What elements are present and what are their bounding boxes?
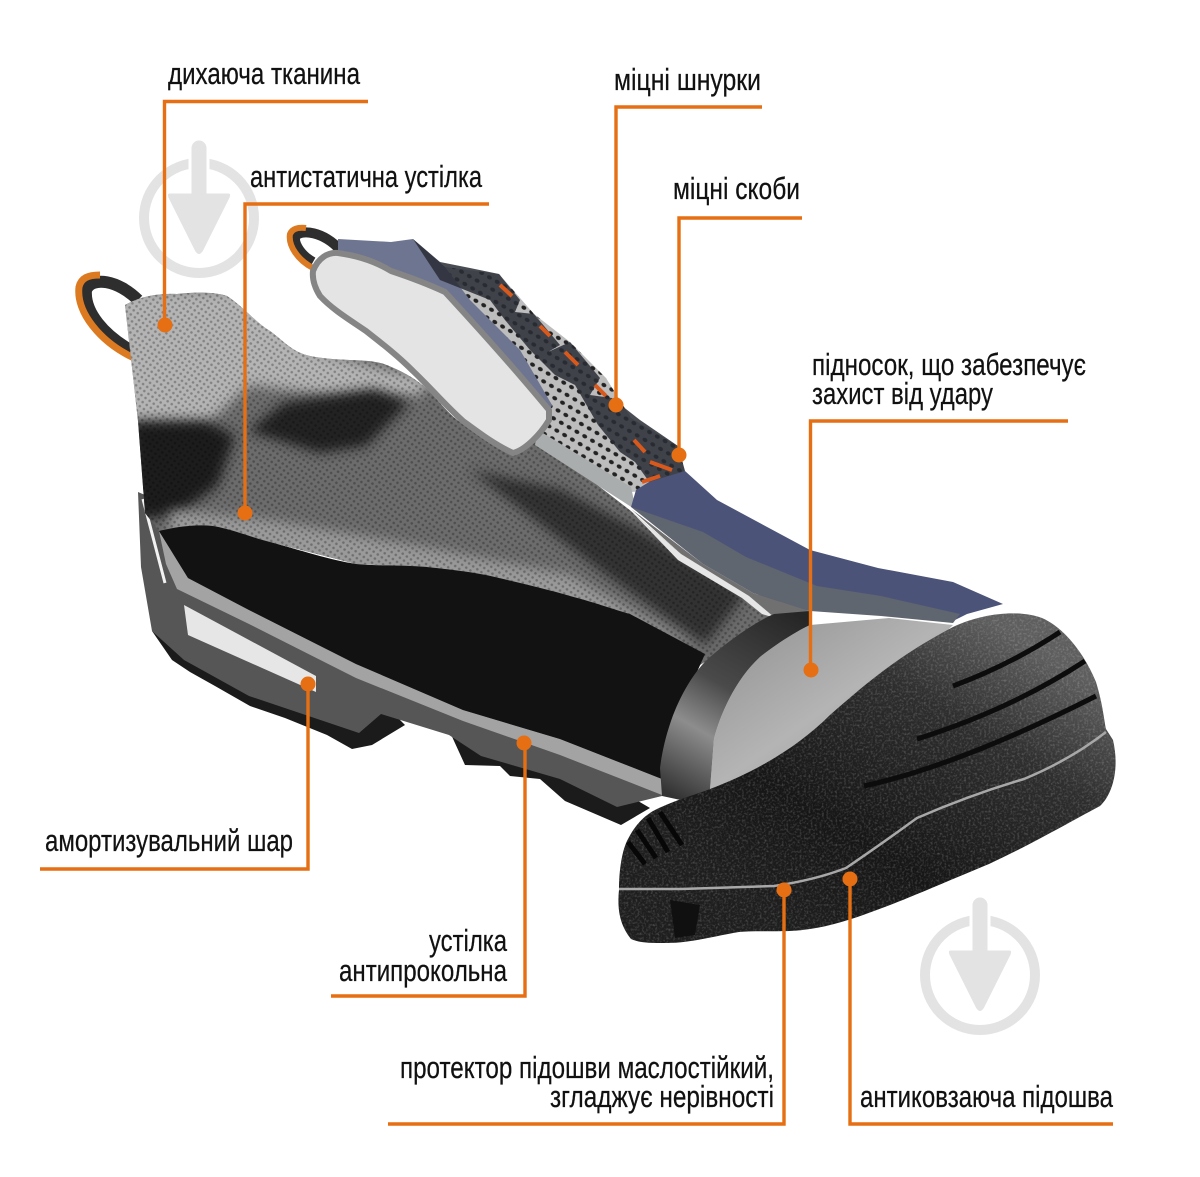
perforated lace panel <box>391 250 685 492</box>
grey inner upper behind the frayed edge <box>631 509 810 618</box>
tongue pull loop <box>290 228 340 268</box>
blue tongue edge <box>338 239 552 412</box>
orange lace fibres <box>500 285 672 482</box>
white edge on heel <box>143 499 165 583</box>
toe tread notch <box>670 900 700 938</box>
mesh wall of the lining <box>115 290 790 670</box>
callout: oil-resistant tread: протектор підошви маслостійкий, <box>400 1050 774 1085</box>
black insole <box>159 525 705 779</box>
cap surface grain <box>618 613 1116 943</box>
watermark: top left logo <box>144 139 254 273</box>
dark heel band <box>130 421 235 520</box>
callout: strong laces <box>608 62 762 412</box>
toe bumper ribs <box>628 812 682 864</box>
callout: antistatic insole: антистатична устілка <box>250 159 483 194</box>
callout: breathable fabric: дихаюча тканина <box>168 56 361 91</box>
denim toe panel <box>631 471 1003 621</box>
light frayed strip <box>535 430 636 510</box>
callout: anti-slip sole: антиковзаюча підошва <box>860 1079 1114 1114</box>
callout: puncture-proof insole: антипрокольна <box>339 953 508 988</box>
weave texture <box>120 290 790 670</box>
white lining edge <box>631 511 775 618</box>
callout: protective toe cap <box>804 347 1086 678</box>
watermark: bottom right logo <box>925 896 1035 1030</box>
midsole, cushioning layer <box>138 492 662 807</box>
puncture-proof fuzzy strip <box>159 531 662 795</box>
dark toe-side band <box>470 470 745 645</box>
light heel zone <box>115 290 430 425</box>
dark outsole lugs <box>152 631 650 825</box>
callout: strong eyelets: міцні скоби <box>673 171 800 206</box>
dark lace pieces <box>413 239 685 490</box>
dark centre fold <box>248 389 409 453</box>
steel toe cap section <box>660 611 810 802</box>
rubber toe cap <box>618 613 1116 943</box>
heel pull loop <box>79 275 138 358</box>
steel toe cap face <box>710 618 953 789</box>
light band above insole <box>170 510 700 650</box>
white reflective strip on heel <box>184 605 316 692</box>
callout: anti-slip sole <box>842 872 1114 1124</box>
callout: breathable fabric <box>158 56 368 332</box>
callout: puncture-proof insole <box>331 736 532 996</box>
frayed denim edge <box>631 507 960 623</box>
sole seam <box>619 732 1106 889</box>
callout: oil-resistant tread <box>388 882 792 1124</box>
cap body <box>618 613 1116 943</box>
callout: strong eyelets <box>672 171 802 462</box>
callout: protective toe cap: підносок, що забезпечує <box>812 347 1086 382</box>
wall base colour <box>120 290 790 670</box>
callout: puncture-proof insole: устілка <box>429 923 508 958</box>
callout: antistatic insole <box>238 159 489 520</box>
callout: cushioning layer: амортизувальний шар <box>45 823 293 858</box>
callout: strong laces: міцні шнурки <box>614 62 761 97</box>
callout: cushioning layer <box>40 676 316 869</box>
white tongue lining <box>313 253 549 453</box>
cap ridges <box>864 632 1096 786</box>
shoe illustration <box>79 228 1116 943</box>
callout: protective toe cap: захист від удару <box>812 376 993 411</box>
callout: oil-resistant tread: згладжує нерівності <box>550 1079 774 1114</box>
